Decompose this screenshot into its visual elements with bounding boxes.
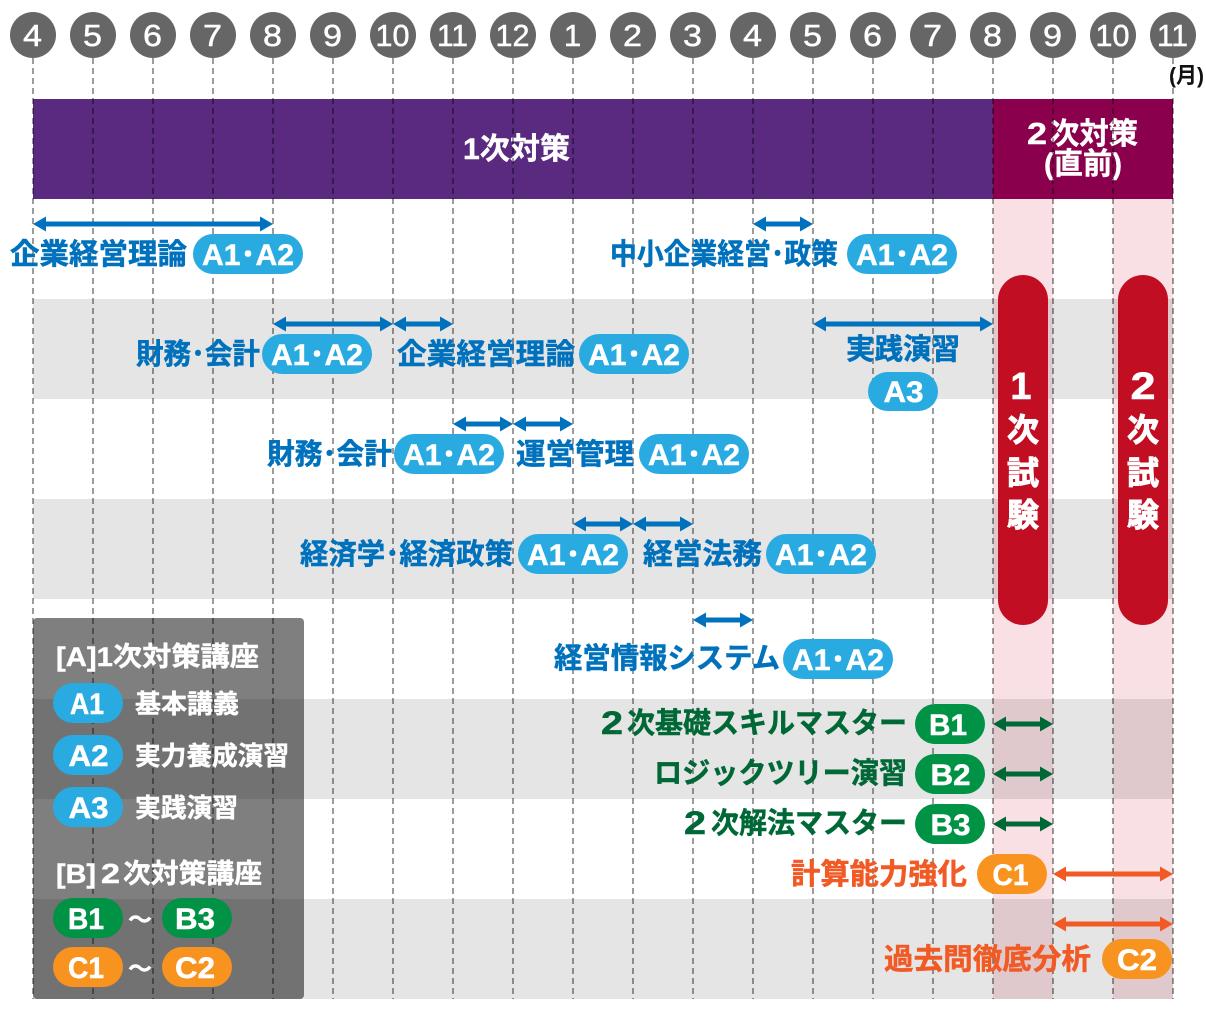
course: ロジックツリー演習: ロジックツリー演習: [654, 757, 907, 790]
exam marker: 1次試験: [998, 275, 1048, 625]
course: 2次解法マスター: 2: [684, 805, 706, 841]
month header circles: 1: [564, 18, 581, 53]
course: 実践演習: 実践演習: [846, 333, 960, 366]
legend range C1 to C2: ～: [128, 956, 152, 983]
course: 2次解法マスター: B3: [930, 809, 970, 842]
month header circles: 7: [203, 18, 222, 53]
course: 実践演習: A3: [884, 376, 924, 409]
month header circles: 5: [83, 18, 102, 53]
exam marker: 2次試験: 2: [1130, 366, 1156, 408]
course: 経営法務: [633, 516, 876, 574]
month header circles: 8: [263, 18, 282, 53]
month header circles: 5: [803, 18, 822, 53]
course: 2次基礎スキルマスター: 2: [601, 705, 623, 741]
month header circles: 12: [496, 18, 530, 53]
legend range B1 to B3: B1: [68, 903, 104, 936]
exam marker: 1次試験: 験: [1007, 497, 1039, 533]
course: 中小企業経営・政策: [610, 216, 957, 274]
panel: legend: [33, 618, 304, 999]
course: 企業経営理論 (first): 企業経営理論: [10, 238, 187, 271]
course: 企業経営理論 (second): A1･A2: [588, 339, 680, 372]
month header circles: 6: [863, 18, 882, 53]
exam marker: 2次試験: 験: [1127, 497, 1159, 533]
course: 財務・会計 (first): A1･A2: [271, 339, 363, 372]
exam marker: 1次試験: 次: [1007, 412, 1039, 448]
legend item A1: A1: [70, 688, 104, 721]
course: 2次基礎スキルマスター: [601, 704, 1053, 744]
phase bar: 1次対策: [33, 99, 993, 199]
course: 経営法務: A1･A2: [775, 539, 867, 572]
course: 企業経営理論 (second): 企業経営理論: [397, 338, 575, 371]
phase bar: 2次対策(直前): 次対策: [1050, 118, 1138, 151]
course: 企業経営理論 (second): [393, 316, 689, 374]
legend item A2: 実力養成演習: [135, 741, 289, 771]
legend item A2: A2: [68, 740, 108, 773]
month header circles: 3: [683, 18, 702, 53]
month header circles: 6: [143, 18, 162, 53]
course: 財務・会計 (first): 財務･会計: [136, 338, 260, 371]
legend heading A: [A]1次対策講座: [56, 642, 259, 672]
course: 計算能力強化: [791, 854, 1173, 894]
phase bar: 1次対策: 1次対策: [463, 133, 570, 166]
phase bar: 2次対策(直前): (直前): [1044, 148, 1122, 181]
course: ロジックツリー演習: [654, 754, 1053, 794]
exam marker: 2次試験: 次: [1127, 412, 1159, 448]
month header circles: [10, 12, 1196, 58]
course: 財務・会計 (second): [267, 416, 513, 474]
exam marker: 2次試験: 試: [1127, 455, 1159, 491]
course: 計算能力強化: 計算能力強化: [791, 858, 967, 891]
course: 運営管理: 運営管理: [516, 438, 634, 471]
month header circles: 11: [1157, 18, 1188, 53]
legend heading B: [B]: [56, 859, 96, 889]
course: 経営法務: 経営法務: [643, 538, 762, 571]
course: 財務・会計 (second): 財務･会計: [267, 438, 392, 471]
course: 2次基礎スキルマスター: B1: [929, 709, 967, 742]
course: 過去問徹底分析: C2: [1117, 944, 1157, 977]
legend item A1: [53, 683, 239, 723]
course: 過去問徹底分析: 過去問徹底分析: [884, 943, 1091, 976]
phase bar: 2次対策(直前): 2: [1027, 116, 1047, 151]
course: 財務・会計 (second): A1･A2: [403, 439, 495, 472]
course: 過去問徹底分析: [884, 916, 1173, 979]
course: 経済学・経済政策: A1･A2: [527, 539, 619, 572]
legend range B1 to B3: [53, 898, 232, 938]
course: 計算能力強化: C1: [992, 859, 1028, 892]
legend item A3: A3: [68, 792, 108, 825]
course: 経営情報システム: A1･A2: [792, 644, 884, 677]
exam marker: 2次試験: [1118, 275, 1168, 625]
legend heading B: 次対策講座: [123, 859, 262, 889]
course: 企業経営理論 (first): [10, 216, 303, 274]
legend heading B: 2: [101, 858, 120, 889]
course: 中小企業経営・政策: 中小企業経営･政策: [610, 238, 838, 271]
month header circles: 7: [923, 18, 942, 53]
month header circles: 2: [623, 18, 642, 53]
course: 2次解法マスター: [684, 804, 1053, 844]
legend item A3: 実践演習: [135, 793, 238, 823]
legend range C1 to C2: C2: [175, 952, 215, 985]
legend item A3: [53, 787, 238, 827]
month header circles: 9: [323, 18, 342, 53]
month header circles: 10: [376, 18, 410, 53]
course: 経済学・経済政策: [300, 516, 633, 574]
exam marker: 1次試験: 試: [1007, 455, 1039, 491]
month header circles: 4: [743, 18, 762, 53]
exam marker: 1次試験: 1: [1010, 366, 1032, 408]
course: 経済学・経済政策: 経済学･経済政策: [300, 538, 513, 571]
course: 企業経営理論 (first): A1･A2: [202, 239, 294, 272]
course: ロジックツリー演習: B2: [930, 759, 970, 792]
course: 2次基礎スキルマスター: 次基礎スキルマスター: [627, 707, 907, 740]
legend range C1 to C2: [53, 947, 232, 987]
legend item A2: [53, 735, 289, 775]
course: 実践演習: [813, 316, 993, 411]
phase bar: 2次対策(直前): [993, 99, 1173, 199]
course: 中小企業経営・政策: A1･A2: [856, 239, 948, 272]
month header circles: 8: [983, 18, 1002, 53]
course: 運営管理: A1･A2: [648, 439, 740, 472]
course: 経営情報システム: 経営情報システム: [554, 642, 780, 675]
unit label: month: (月): [1169, 63, 1204, 88]
legend heading B: [56, 858, 262, 889]
legend item A1: 基本講義: [135, 689, 239, 719]
month header circles: 9: [1043, 18, 1062, 53]
legend range B1 to B3: B3: [175, 903, 215, 936]
legend range C1 to C2: C1: [68, 952, 104, 985]
course: 経営情報システム: [554, 612, 893, 679]
course: 運営管理: [513, 416, 749, 474]
month header circles: 10: [1096, 18, 1130, 53]
legend range B1 to B3: ～: [128, 907, 152, 934]
course: 2次解法マスター: 次解法マスター: [711, 807, 907, 840]
month header circles: 4: [23, 18, 42, 53]
course: 財務・会計 (first): [136, 316, 393, 374]
month header circles: 11: [437, 18, 468, 53]
